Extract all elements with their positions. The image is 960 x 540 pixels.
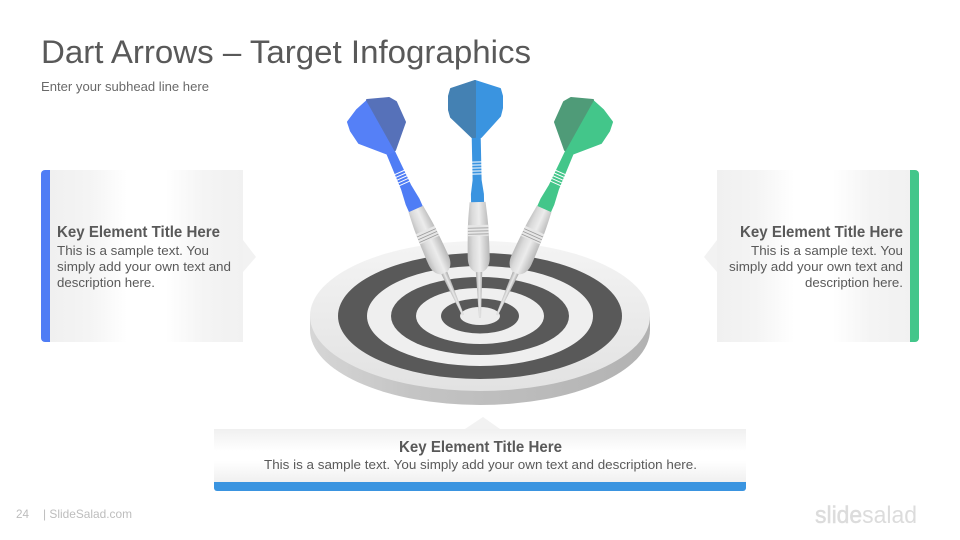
target board (310, 241, 650, 405)
left panel background (50, 170, 243, 342)
bottom panel title: Key Element Title Here (399, 439, 562, 456)
inner light ring (416, 288, 544, 344)
green dart body (487, 148, 579, 319)
board side (310, 316, 650, 405)
dart: center blue (449, 81, 502, 318)
footer logo: slidesalad (815, 502, 917, 529)
bottom panel accent bar (214, 482, 746, 491)
panel: bottom key element (214, 417, 746, 491)
right panel text: description here. (805, 275, 903, 290)
board face (310, 241, 650, 391)
center flight dark half (449, 81, 475, 137)
center flight light half (475, 81, 502, 137)
left panel title: Key Element Title Here (57, 224, 220, 241)
panel: left key element (41, 170, 256, 342)
panel: right key element (704, 170, 919, 342)
right panel arrow (704, 240, 717, 272)
dart: blue (348, 98, 473, 319)
blue dart body (381, 148, 473, 319)
middle dark ring (391, 277, 569, 355)
inner dark ring (441, 298, 519, 334)
subhead: Enter your subhead line here (41, 80, 209, 94)
title: Dart Arrows – Target Infographics (41, 34, 531, 70)
outer light ring (367, 266, 593, 366)
left panel text: description here. (57, 275, 155, 290)
bullseye (460, 307, 500, 325)
bottom panel arrow (465, 417, 500, 429)
blue flight light half (348, 101, 394, 154)
footer page number: 24 (16, 507, 29, 521)
bottom panel background (214, 429, 746, 482)
left panel arrow (243, 240, 256, 272)
green flight dark half (555, 98, 593, 150)
right panel text (729, 243, 903, 290)
dart: green (487, 98, 612, 319)
outer dark ring (338, 253, 622, 379)
right panel background (717, 170, 910, 342)
left panel text (57, 243, 231, 290)
center dart body (465, 136, 491, 318)
right panel text: simply add your own text and (729, 259, 903, 274)
left panel accent bar (41, 170, 50, 342)
green flight light half (566, 101, 612, 154)
right panel text: This is a sample text. You (751, 243, 903, 258)
right panel title: Key Element Title Here (740, 224, 903, 241)
right panel accent bar (910, 170, 919, 342)
bottom panel text: This is a sample text. You simply add your own text and description here. (264, 457, 697, 472)
footer site name: | SlideSalad.com (43, 507, 132, 521)
left panel text: This is a sample text. You (57, 243, 209, 258)
blue flight dark half (367, 98, 405, 150)
left panel text: simply add your own text and (57, 259, 231, 274)
